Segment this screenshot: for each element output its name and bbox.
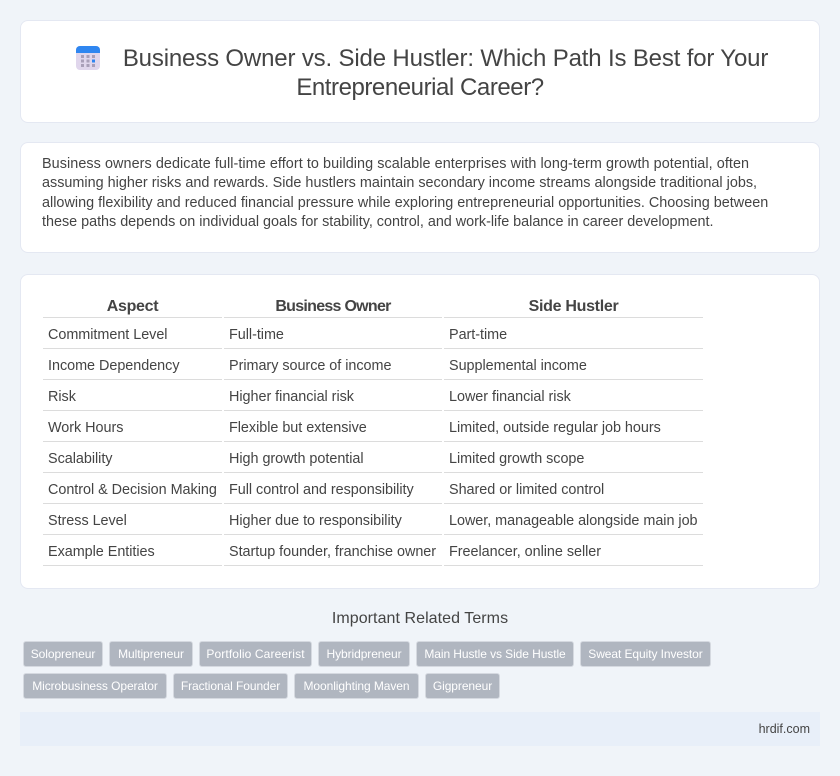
tag: Gigpreneur: Gigpreneur: [433, 679, 492, 693]
comparison table: Flexible but extensive: [229, 420, 367, 436]
tag: Multipreneur: [109, 641, 193, 667]
comparison table: Full control and responsibility: [229, 482, 414, 498]
tag: Main Hustle vs Side Hustle: [416, 641, 574, 667]
tag: Sweat Equity Investor: [580, 641, 711, 667]
tag: Hybridpreneur: Hybridpreneur: [326, 647, 402, 661]
comparison table: Lower, manageable alongside main job: [449, 513, 698, 529]
tag: Solopreneur: [23, 641, 103, 667]
comparison table: Limited, outside regular job hours: [449, 420, 661, 436]
panel: description: [20, 142, 820, 253]
comparison table: Primary source of income: [229, 358, 391, 374]
panel: comparison table: [20, 274, 820, 589]
title: Business Owner vs. Side Hustler: Which Path Is Best for Your: [123, 45, 768, 72]
tag: Microbusiness Operator: Microbusiness Operator: [32, 679, 158, 693]
row: Stress Level: Stress Level: [48, 513, 127, 529]
tag: Microbusiness Operator: [23, 673, 167, 699]
comparison table: Lower financial risk: [449, 389, 571, 405]
tag: Portfolio Careerist: [199, 641, 312, 667]
tag: Fractional Founder: Fractional Founder: [181, 679, 280, 693]
comparison table: Startup founder, franchise owner: [229, 544, 436, 560]
panel: title header: [20, 20, 820, 123]
tag: Moonlighting Maven: Moonlighting Maven: [304, 679, 409, 693]
description text: assuming higher risks and rewards. Side hustlers maintain secondary income streams alongside traditional jobs,: [42, 175, 757, 191]
row: Risk: Risk: [48, 389, 76, 405]
comparison table: Freelancer, online seller: [449, 544, 601, 560]
related term tags: [23, 641, 711, 699]
footer text: hrdif.com: hrdif.com: [759, 722, 810, 736]
description text: allowing flexibility and reduced financial pressure while exploring entrepreneurial opportunities. Choosing between: [42, 195, 768, 211]
row: Work Hours: Work Hours: [48, 420, 123, 436]
comparison table: Higher due to responsibility: [229, 513, 402, 529]
comparison table: High growth potential: [229, 451, 364, 467]
tag: Gigpreneur: [425, 673, 500, 699]
description text: [42, 156, 768, 230]
tag: Fractional Founder: [173, 673, 288, 699]
tag: Solopreneur: Solopreneur: [31, 647, 95, 661]
title: [123, 45, 768, 101]
tag: Sweat Equity Investor: Sweat Equity Investor: [588, 647, 703, 661]
icon: calendar: [76, 46, 100, 70]
header: Side Hustler: Side Hustler: [529, 298, 618, 315]
description text: Business owners dedicate full-time effort to building scalable enterprises with long-term growth potential, often: [42, 156, 749, 172]
comparison table: Full-time: [229, 327, 284, 343]
header: Aspect: Aspect: [107, 298, 158, 315]
row: Commitment Level: Commitment Level: [48, 327, 167, 343]
comparison table: Higher financial risk: [229, 389, 354, 405]
row: Example Entities: Example Entities: [48, 544, 155, 560]
tag: Hybridpreneur: [318, 641, 410, 667]
comparison table: Part-time: [449, 327, 507, 343]
header: Business Owner: Business Owner: [275, 298, 391, 315]
tag: Portfolio Careerist: Portfolio Careerist: [206, 647, 305, 661]
footer band: [20, 712, 820, 746]
description text: these paths depends on individual goals for stability, control, and work-life balance in career development.: [42, 214, 713, 230]
row: Scalability: Scalability: [48, 451, 112, 467]
comparison table: Supplemental income: [449, 358, 587, 374]
comparison table: Limited growth scope: [449, 451, 584, 467]
heading: Important Related Terms: Important Related Terms: [332, 610, 508, 627]
row: Income Dependency: Income Dependency: [48, 358, 180, 374]
tag: Multipreneur: Multipreneur: [118, 647, 184, 661]
title: Entrepreneurial Career?: [296, 74, 544, 101]
tag: Main Hustle vs Side Hustle: Main Hustle vs Side Hustle: [424, 647, 566, 661]
tag: Moonlighting Maven: [294, 673, 419, 699]
comparison table: [43, 298, 703, 566]
row: Control & Decision Making: Control & Decision Making: [48, 482, 217, 498]
comparison table: Shared or limited control: [449, 482, 604, 498]
